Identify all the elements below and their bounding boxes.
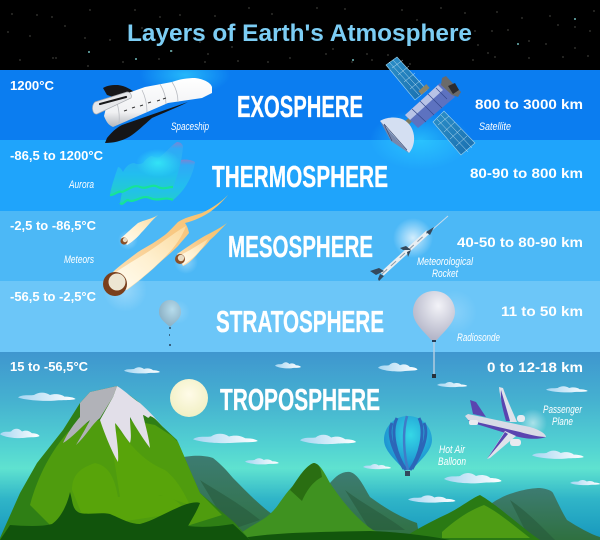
icon: satellite xyxy=(380,57,475,155)
label: spaceship: Spaceship xyxy=(171,121,209,133)
panel: mesosphere band xyxy=(0,211,600,281)
temperature: exosphere: 1200°C xyxy=(10,78,55,93)
altitude: exosphere: 800 to 3000 km xyxy=(475,96,583,112)
icon: small meteor xyxy=(120,215,158,245)
heading: stratosphere: STRATOSPHERE xyxy=(216,304,384,339)
icon: spaceship xyxy=(93,78,212,143)
panel: thermosphere band xyxy=(0,140,600,211)
label: meteorological rocket: Meteorological xyxy=(417,256,473,268)
icon: sun xyxy=(170,379,208,417)
illustration: main mountain xyxy=(0,386,250,540)
temperature: mesosphere: -2,5 to -86,5°C xyxy=(10,218,97,233)
label: meteorological rocket xyxy=(417,256,473,280)
title: Layers of Earth's Atmosphere xyxy=(127,20,472,47)
label: hot air balloon: Balloon xyxy=(438,456,466,468)
heading: mesosphere: MESOSPHERE xyxy=(228,229,373,264)
illustration: back mountains xyxy=(180,456,600,540)
clouds xyxy=(0,362,600,503)
label: hot air balloon: Hot Air xyxy=(439,444,466,456)
icon: hot air balloon xyxy=(384,416,432,476)
panel: stratosphere band xyxy=(0,281,600,352)
label: passenger plane: Plane xyxy=(552,416,573,428)
glows behind illustrations xyxy=(103,55,547,437)
heading: thermosphere: THERMOSPHERE xyxy=(212,159,388,194)
temperature: troposphere: 15 to -56,5°C xyxy=(10,359,89,374)
icon: small stratospheric balloon xyxy=(159,300,181,346)
panel: exosphere band xyxy=(0,70,600,141)
temperature: thermosphere: -86,5 to 1200°C xyxy=(10,148,104,163)
label: hot air balloon xyxy=(438,444,466,468)
heading: troposphere: TROPOSPHERE xyxy=(220,382,380,417)
altitude: troposphere: 0 to 12-18 km xyxy=(487,359,583,375)
icon: large meteor xyxy=(103,195,228,296)
altitude: thermosphere: 80-90 to 800 km xyxy=(470,165,583,181)
icon: medium meteor xyxy=(175,223,227,266)
label: passenger plane: Passenger xyxy=(543,404,583,416)
altitude: stratosphere: 11 to 50 km xyxy=(501,303,583,319)
illustration: green foothills xyxy=(230,463,540,540)
panel: troposphere band xyxy=(0,352,600,540)
space background with stars xyxy=(0,0,600,71)
icon: radiosonde balloon xyxy=(413,291,455,378)
heading: exosphere: EXOSPHERE xyxy=(237,89,363,124)
icon: aurora xyxy=(110,142,195,204)
label: meteors: Meteors xyxy=(64,254,94,266)
label: passenger plane xyxy=(543,404,583,428)
label: meteorological rocket: Rocket xyxy=(432,268,459,280)
label: aurora: Aurora xyxy=(68,179,94,191)
icon: passenger plane xyxy=(465,387,546,459)
altitude: mesosphere: 40-50 to 80-90 km xyxy=(457,234,583,250)
icon: meteorological rocket xyxy=(370,216,448,281)
temperature: stratosphere: -56,5 to -2,5°C xyxy=(10,289,97,304)
label: satellite: Satellite xyxy=(479,121,511,133)
label: radiosonde: Radiosonde xyxy=(457,332,500,344)
